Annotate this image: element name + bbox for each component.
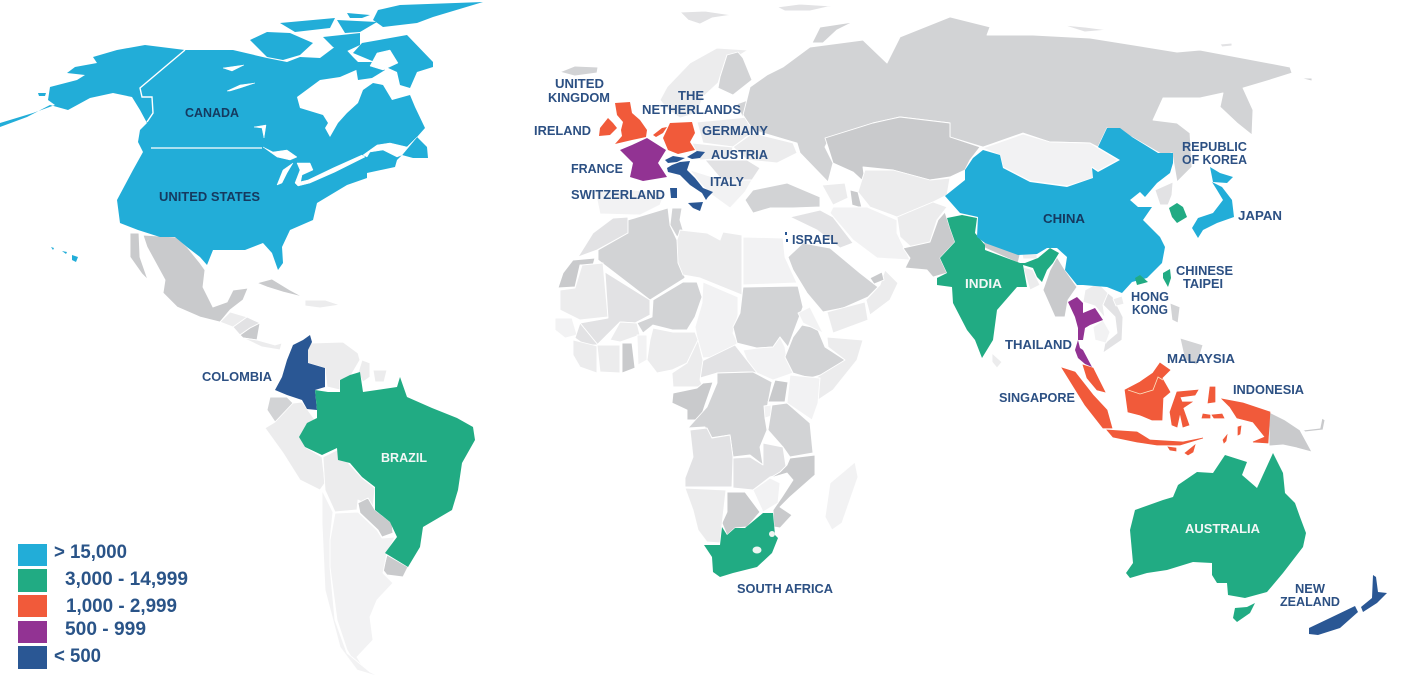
country: Canada and United States [0,2,483,270]
legend [18,542,188,669]
country: Japan [1192,167,1234,238]
map label: New Zealand: NEW [1295,581,1326,596]
country: Malaysia, Singapore and Indonesia [1062,363,1270,455]
map label: Hong Kong [1131,289,1169,317]
legend text: 3,000 to 14,999: 3,000 - 14,999 [65,569,188,590]
legend swatch: 1,000 to 2,999 [18,595,47,617]
map label: Canada: CANADA [185,105,240,120]
country: Israel [785,232,788,242]
country: China [945,128,1173,293]
country: Chinese Taipei [1163,269,1171,287]
map label: United Kingdom: UNITED [555,76,604,91]
country: France [620,138,667,181]
legend text: 500 to 999: 500 - 999 [65,619,146,640]
grey countries: Southeast Asia and Oceania [825,257,1325,530]
country: Ireland [599,118,617,136]
map label: United States: UNITED STATES [159,189,260,204]
map label: Republic of Korea: OF KOREA [1182,152,1248,167]
map label: Colombia: COLOMBIA [202,369,273,384]
map label: Thailand: THAILAND [1005,337,1072,352]
map label: Chinese Taipei: TAIPEI [1183,276,1223,291]
country: South Africa [704,513,778,577]
map label: Australia: AUSTRALIA [1185,521,1261,536]
legend text: over 15,000: > 15,000 [54,542,127,563]
country: Republic of Korea [1169,203,1187,223]
grey countries: Central Asia and Middle East [788,117,1173,368]
map label: Brazil: BRAZIL [381,450,427,465]
map label: The Netherlands: THE [678,88,704,103]
map label: Israel: ISRAEL [792,232,838,247]
map label: Malaysia: MALAYSIA [1167,351,1236,366]
map label: United Kingdom [548,76,610,105]
country: Italy [667,161,713,211]
map label: India: INDIA [965,276,1003,291]
country: Thailand [1068,297,1103,367]
legend swatch: 500 to 999 [18,621,47,643]
map label: Switzerland: SWITZERLAND [571,187,665,202]
country: Germany [663,122,695,154]
legend swatch: over 15,000 [18,544,47,566]
map label: South Africa: SOUTH AFRICA [737,581,834,596]
country: United Kingdom [615,102,647,144]
country: New Zealand [1309,575,1387,635]
map label: The Netherlands: NETHERLANDS [642,102,741,117]
country: Switzerland [665,156,685,163]
map label: Chinese Taipei [1176,263,1233,291]
map label: Republic of Korea [1182,139,1248,167]
grey countries: Africa [555,208,863,543]
map label: Italy: ITALY [710,174,744,189]
map label: Indonesia: INDONESIA [1233,382,1305,397]
map label: Singapore: SINGAPORE [999,390,1075,405]
map label: New Zealand [1280,581,1340,609]
country: Australia [1126,453,1306,622]
country: The Netherlands [653,127,667,137]
country: Austria [687,151,705,159]
map label: Hong Kong: KONG [1132,302,1168,317]
map label: Germany: GERMANY [702,123,768,138]
legend text: 1,000 to 2,999: 1,000 - 2,999 [66,596,177,617]
grey countries: Americas [130,233,408,677]
lakes and national borders of North America [0,2,483,270]
legend swatch: under 500 [18,646,47,669]
legend swatch: 3,000 to 14,999 [18,569,47,592]
country: Hong Kong [1135,275,1148,285]
map label: United Kingdom: KINGDOM [548,90,610,105]
map label: Hong Kong: HONG [1131,289,1169,304]
country: Brazil [299,372,475,567]
map label: Ireland: IRELAND [534,123,591,138]
map label: Chinese Taipei: CHINESE [1176,263,1233,278]
grey countries: Europe [560,4,1312,215]
map label: Austria: AUSTRIA [711,147,769,162]
map label: The Netherlands [642,88,741,117]
map label: France: FRANCE [571,161,623,176]
map label: Republic of Korea: REPUBLIC [1182,139,1248,154]
map label: Japan: JAPAN [1238,208,1282,223]
country: India [937,215,1059,358]
map label: New Zealand: ZEALAND [1280,594,1340,609]
legend text: under 500: < 500 [54,646,101,667]
map label: China: CHINA [1043,211,1086,226]
country: Colombia [275,335,325,410]
